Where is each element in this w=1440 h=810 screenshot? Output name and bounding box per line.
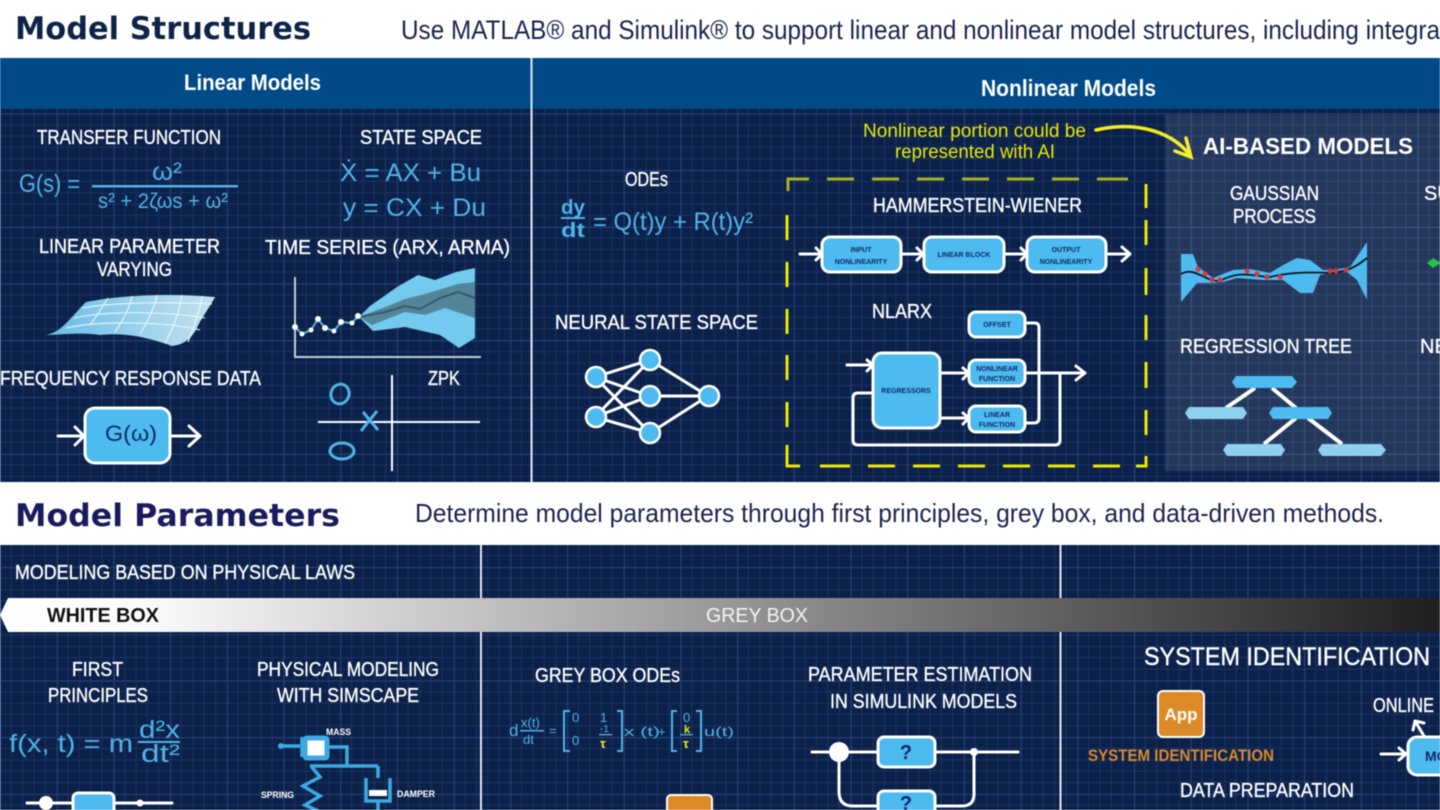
icon: app [1158,691,1204,737]
block diagram: NLARX: LINEAR [984,412,1010,419]
label: time series: TIME SERIES (ARX, ARMA) [265,237,510,259]
label: physical modeling with Simscape [257,659,439,707]
label: parameter estimation: IN SIMULINK MODELS [830,691,1017,713]
label: modeling based on physical laws: MODELING BASED ON PHYSICAL LAWS [15,562,355,584]
equation: ODE [561,197,753,242]
icon: app: App [1164,705,1198,724]
label: linear parameter varying [39,236,220,281]
equation: grey box ODE: -1 [600,724,609,735]
label: first principles [48,659,148,707]
time series chart [292,268,481,357]
equation: grey box ODE: τ [683,736,689,751]
equation: grey box ODE: = [549,723,557,738]
label: state space: STATE SPACE [360,127,482,149]
equation: transfer function: s² + 2ζωs + ω² [98,190,228,213]
callout: nonlinear portion [863,120,1086,163]
equation: ODE: dy [561,197,586,219]
equation: grey box ODE: x(t) [521,715,540,730]
surface plot [46,295,215,346]
block diagram: Hammerstein-Wiener: OUTPUT [1052,247,1081,254]
equation: Newton's law: dt² [141,740,180,768]
header band [0,58,1440,109]
Simscape mass spring damper [261,727,435,810]
panel: nonlinear models [555,120,1191,466]
label: parameter estimation [808,664,1032,713]
block diagram: Hammerstein-Wiener [800,237,1130,272]
block diagram: NLARX: OFFSET [983,322,1012,329]
label: physical modeling with Simscape: WITH SIMSCAPE [277,685,419,707]
block diagram: G(omega): G(ω) [105,421,157,446]
pole-zero plot [318,375,480,471]
cropped marker: green diamond [1427,258,1440,268]
Simscape mass spring damper: MASS [326,727,351,737]
block diagram: NLARX: REGRESSORS [881,388,931,395]
heading: Nonlinear Models: Nonlinear Models [981,75,1156,101]
block diagram: first principles [27,793,172,810]
label: white box: WHITE BOX [47,605,160,627]
title: Model Structures: Model Structures [15,11,311,47]
block diagram: NLARX [847,312,1085,445]
title: Model Parameters: Model Parameters [15,498,340,534]
label: ZPK: ZPK [428,368,461,390]
arrow: to AI-based models [1096,127,1191,157]
Gaussian process plot [1181,242,1367,302]
block diagram: online model (cropped) [1381,721,1440,775]
equation: Newton's law: d²x [139,716,181,744]
equation: grey box ODE: 0 [572,710,579,725]
Simscape mass spring damper: DAMPER [397,789,435,799]
block diagram: NLARX: FUNCTION [979,422,1015,429]
subtitle: model parameters: Determine model parameters through first principles, grey box, and data-driven methods. [415,498,1384,528]
label: regression tree: REGRESSION TREE [1180,336,1352,358]
equation: state space [340,158,486,222]
label: first principles: FIRST [72,659,123,681]
panel dividers [481,545,1060,810]
block diagram: G(omega) [58,408,200,463]
equation: grey box ODE: 1 [600,710,607,725]
block diagram: parameter estimation [812,737,1018,810]
equation: transfer function [19,158,238,213]
label: system identification app: SYSTEM IDENTIFICATION [1088,746,1274,765]
panel divider [530,58,532,482]
panel: grey box [509,664,1032,810]
label: frequency response data: FREQUENCY RESPONSE DATA [0,368,262,390]
equation: grey box ODE: k [684,724,691,736]
label: grey box ODEs: GREY BOX ODEs [535,665,680,687]
dashed box: nonlinear portion [787,179,1146,466]
label: parameter estimation: PARAMETER ESTIMATION [808,664,1032,686]
equation: grey box ODE: τ [600,736,606,751]
equation: grey box ODE: + [658,724,666,739]
equation: grey box ODE: dt [523,732,534,747]
label: first principles: PRINCIPLES [48,685,148,707]
equation: grey box ODE: 0 [572,733,579,748]
label: physical modeling with Simscape: PHYSICAL MODELING [257,659,439,681]
gradient bar: white box to black box [0,598,1440,632]
neural network diagram [586,350,719,443]
panel: linear models [0,127,510,471]
equation: ODE: = Q(t)y + R(t)y² [593,208,753,236]
panel background: model structures [0,109,1440,482]
label: linear parameter varying: LINEAR PARAMETER [39,236,220,258]
block diagram: parameter estimation: ? [900,742,912,764]
callout: nonlinear portion: Nonlinear portion could be [863,120,1086,142]
equation: state space: y = CX + Du [343,194,486,222]
equation: grey box ODE: x (t) [624,724,660,739]
label: transfer function: TRANSFER FUNCTION [37,127,221,149]
block diagram: NLARX: NONLINEAR [976,366,1018,373]
equation: grey box ODE: u(t) [704,724,734,739]
equation: grey box ODE: d [509,721,518,740]
equation: Newton's law: f(x, t) = m [9,730,133,758]
block diagram: Hammerstein-Wiener: INPUT [850,247,872,254]
block diagram: Hammerstein-Wiener: LINEAR BLOCK [938,252,990,259]
panel: AI-based models [1165,115,1440,471]
equation: grey box ODE [509,710,734,751]
label: linear parameter varying: VARYING [97,259,172,281]
block diagram: Hammerstein-Wiener: NONLINEARITY [835,259,888,266]
label: ODEs: ODEs [625,169,668,191]
label: grey box: GREY BOX [706,605,808,627]
panel: first principles and Simscape [9,659,439,810]
equation: Newton's law [9,716,181,768]
label: Gaussian process [1230,183,1319,228]
heading: Linear Models: Linear Models [184,70,321,95]
callout: nonlinear portion: represented with AI [895,141,1055,163]
label: NLARX: NLARX [872,301,932,323]
Simscape mass spring damper: SPRING [261,790,294,800]
equation: transfer function: ω² [152,158,182,186]
equation: grey box ODE: 0 [683,710,690,725]
panel background: model parameters [0,545,1440,810]
heading: AI-based models: AI-BASED MODELS [1203,133,1413,159]
label: data preparation: DATA PREPARATION [1180,780,1354,802]
label: Hammerstein-Wiener: HAMMERSTEIN-WIENER [873,195,1082,217]
label: Gaussian process: PROCESS [1233,206,1316,228]
label: Gaussian process: GAUSSIAN [1230,183,1319,205]
equation: ODE: dt [561,220,585,242]
equation: state space: Ẋ = AX + Bu [340,158,481,187]
block diagram: NLARX: FUNCTION [979,376,1015,383]
block diagram: Hammerstein-Wiener: NONLINEARITY [1040,259,1093,266]
label: neural state space: NEURAL STATE SPACE [555,312,758,334]
panel: system identification [1088,643,1440,802]
regression tree diagram [1185,376,1386,456]
icon: app (cropped) [667,795,712,810]
equation: transfer function: G(s) = [19,170,80,198]
